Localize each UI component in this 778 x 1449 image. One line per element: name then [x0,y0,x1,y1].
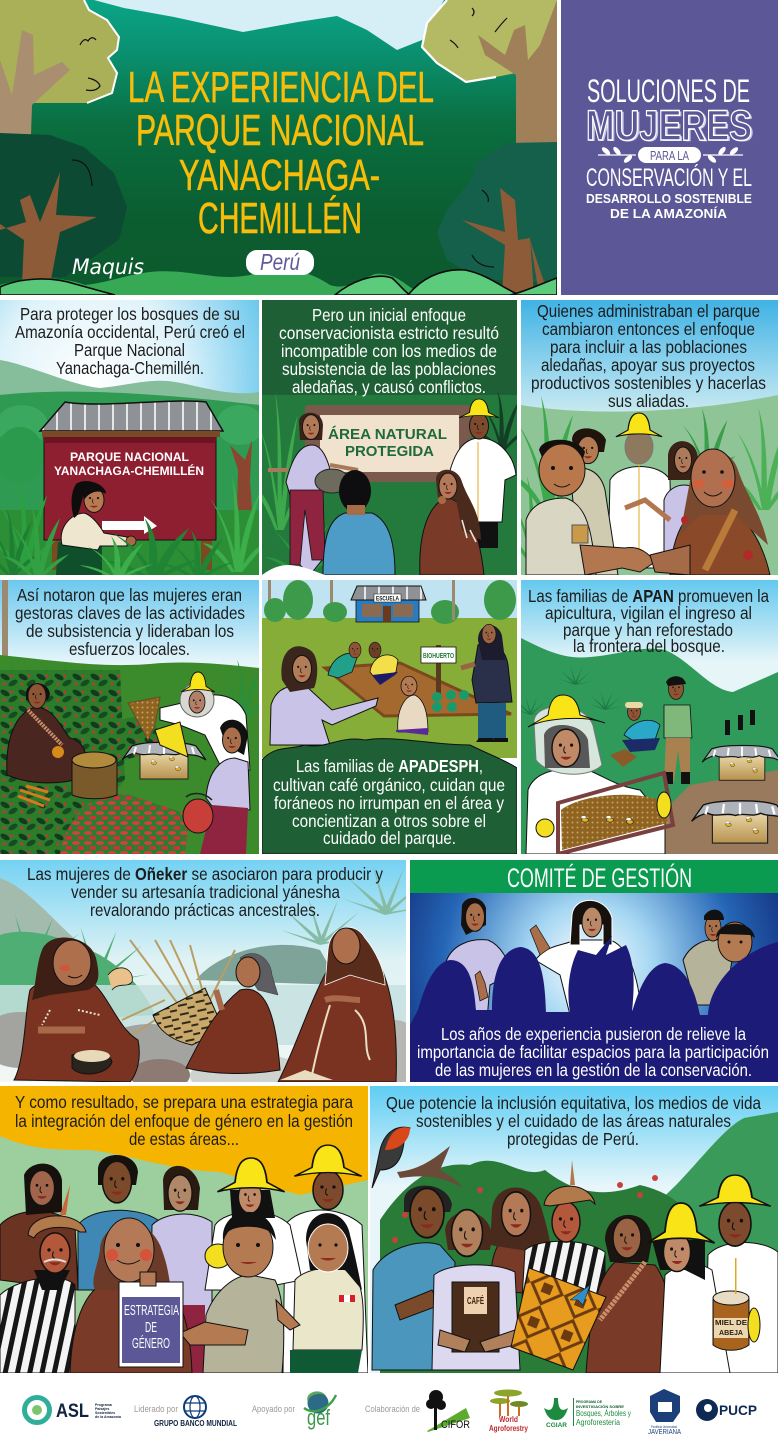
logo: ASL: ASL [56,1401,89,1422]
mountain right [660,1112,778,1373]
strategy document [119,1272,183,1367]
elder back [522,1160,605,1300]
woman cream [276,1213,363,1373]
sky behind mountain [94,0,444,50]
sponsor: gef: gef [307,1405,331,1430]
text: panel 3: para incluir a las poblaciones [550,337,747,357]
panel: park creation sign [0,300,269,578]
sponsor: world bank: GRUPO BANCO MUNDIAL [154,1419,237,1428]
top-left tree [0,0,119,135]
subtitle lines: DE LA AMAZONÍA [610,206,728,221]
posts [52,540,212,570]
basket [153,988,224,1045]
text: panel 2 [279,305,499,397]
area sign: PROTEGIDA [345,443,434,460]
sponsor: gef: Apoyado por [252,1404,295,1414]
panel: Oñeker artisans [0,860,433,1100]
text: panel 3 [531,301,766,411]
ranger left [526,440,596,575]
audience silhouettes [410,936,778,1082]
garden bed [325,663,511,716]
text: panel 9 [15,1092,353,1149]
collaborator: CGIAR FTA: PROGRAMA DE [576,1399,602,1404]
heading band: COMITÉ DE GESTIÓN [507,862,692,893]
beekeeper man [446,399,516,548]
lower-right tree [437,142,557,300]
text: panel 2: incompatible con los medios de [281,341,497,361]
seated woman [420,470,484,575]
sponsor: world bank [134,1396,237,1428]
country label: Perú [260,249,300,275]
beekeeper woman [526,695,665,854]
area sign [305,405,471,482]
woman 1 [14,938,139,1082]
collaborator: CGIAR FTA: CGIAR [546,1422,567,1429]
central woman [530,900,640,1015]
girl with book [432,1210,520,1370]
text: panel 4: Así notaron que las mujeres eran [17,585,242,605]
sign board [40,401,223,540]
text: panel 3: sus aliadas. [608,391,689,411]
lower-left tree [0,133,127,285]
beekeeper woman [647,1203,730,1373]
woman lilac [151,1166,212,1373]
logo: ASL: Paisajes [95,1407,109,1411]
woman back [490,1188,552,1295]
strategy document: DE [145,1319,157,1336]
strategy document: ESTRATEGIA [124,1302,179,1319]
text: panel 9: de estas áreas... [129,1129,239,1149]
subtitle lines [586,163,752,221]
big woman [670,449,770,575]
bushes [0,270,557,295]
woman back left [0,1164,78,1290]
biohuerto sign [421,645,456,695]
honey frame [536,773,673,854]
collaborator: World Agroforestry: World [499,1415,518,1424]
trees at sides [0,405,259,510]
sign board: PARQUE NACIONAL [70,452,189,464]
handshake [580,500,690,575]
text: panel 9: la integración del enfoque de género en la gestión [15,1111,353,1131]
butterfly [570,1285,590,1305]
beekeeper man [699,1175,778,1373]
logo: ASL [24,1398,122,1422]
title: LA EXPERIENCIA DEL [128,63,434,112]
hives [702,745,778,780]
collaborator: CIFOR: Colaboración de [365,1404,420,1414]
text: panel 5: cuidado del parque. [323,828,456,848]
honey jar: ABEJA [719,1328,744,1337]
stump [72,752,117,799]
man blue [78,1155,160,1290]
honey jar [713,1258,760,1350]
logo: ASL: Sostenibles [95,1411,115,1415]
text: panel 5: foráneos no irrumpan en el área y [274,793,504,813]
rocks [0,1012,425,1100]
biohuerto sign: BIOHUERTO [423,653,454,660]
text: panel 4: de subsistencia y lideraban los [26,621,234,641]
beekeeper woman [205,1158,302,1290]
elder [0,1185,86,1373]
woman lilac [664,441,698,552]
squatting man [610,702,660,767]
forest canopy [380,1161,700,1373]
beekeeper with frame [128,672,250,775]
trees [264,580,516,624]
hive [122,742,206,779]
collaborator: PUCP: PUCP [719,1402,757,1418]
dark green text panel [262,739,517,854]
text: panel 5 [273,756,505,848]
text: panel 5: Las familias de APADESPH, [296,756,483,776]
collaborator: CIFOR: CIFOR [441,1419,470,1431]
text: panel 7: revalorando prácticas ancestrales. [90,900,320,920]
text: panel 7: Las mujeres de Oñeker se asociaron para producir y [27,864,383,884]
leaves and pill [598,146,743,164]
text: panel 4: esfuerzos locales. [69,639,190,659]
collaborator: CGIAR FTA [544,1398,631,1429]
honey jar: MIEL DE [715,1318,747,1327]
man blue [372,1186,455,1370]
sticks [122,940,235,1040]
panel: final community [370,1086,778,1373]
panel: protected area conflict [253,300,527,575]
hand gesture [475,971,488,1001]
text: panel 1: Para proteger los bosques de su [20,304,240,324]
ranger man [180,1212,284,1373]
text: panel 1: Yanachaga-Chemillén. [56,358,204,378]
title: YANACHAGA- [179,151,380,200]
standing woman [461,624,512,742]
beekeeper [608,413,672,568]
school: ESCUELA [376,596,400,602]
woman gesturing [270,646,378,745]
text: panel 10: sostenibles y el cuidado de las áreas naturales [416,1111,731,1131]
text: panel 7 [27,864,383,920]
big woman [70,1218,192,1373]
collaborator: CGIAR FTA: Bosques, Árboles y [576,1409,631,1418]
text: panel 4 [15,585,245,659]
child from behind [323,470,395,575]
school [351,586,426,622]
leaves and pill: PARA LA [650,148,689,163]
palms and saplings [514,666,755,735]
panel: title header illustration [0,0,557,300]
area sign: ÁREA NATURAL [328,426,447,443]
woman harvesting [183,720,250,854]
panel: alliance handshake [501,300,778,575]
title [128,63,434,243]
logo: ASL: Programa [95,1403,113,1407]
beekeeper man [283,1145,368,1373]
collaborator: CGIAR FTA: Agroforestería [576,1418,620,1427]
woman planting [56,481,136,575]
collaborator: CIFOR [365,1390,470,1432]
woman 2 [186,953,280,1074]
text: panel 10 [386,1093,761,1149]
text: panel 6: apicultura, vigilan el ingreso al [545,603,752,623]
collaborator: Javeriana: JAVERIANA [648,1429,681,1436]
text: panel 2: Pero un inicial enfoque [312,305,466,325]
footer: partner logos [24,1389,757,1436]
standing man [664,676,692,784]
top-right tree [422,0,557,143]
heading band [410,860,778,893]
collaborator: World Agroforestry [489,1390,528,1433]
woven textile [511,1268,606,1370]
sign board: YANACHAGA-CHEMILLÉN [54,465,204,478]
text: panel 7: vender su artesanía tradicional yánesha [71,882,340,902]
strategy document: GÉNERO [132,1335,170,1352]
panel: Comité de Gestión [410,893,778,1082]
rangers [683,910,755,1005]
title: CHEMILLÉN [198,194,362,243]
panel: biohuerto and school [262,580,517,854]
collaborator: Javeriana: Pontificia Universidad [651,1424,677,1429]
children planting [328,642,469,735]
collaborator: CGIAR FTA: INVESTIGACIÓN SOBRE [576,1404,624,1409]
text: panel 9: Y como resultado, se prepara una estrategia para [15,1092,353,1112]
text: panel 6: Las familias de APAN promueven la [528,586,769,606]
text: panel 1: Parque Nacional [74,340,185,360]
text: panel 1: Amazonía occidental, Perú creó el [15,322,245,342]
sponsor: world bank: Liderado por [134,1404,178,1414]
text: panel 10: protegidas de Perú. [507,1129,639,1149]
grass foreground [0,476,269,578]
text: panel 6: parque y han reforestado [563,620,733,640]
signature: Maquis [72,255,144,279]
text: panel 2: subsistencia de las poblaciones [282,359,496,379]
arrow [102,516,157,534]
text: panel 5: concientizan a otros sobre el [292,811,486,831]
ranger 2 [570,428,618,575]
collaborator: Javeriana [648,1389,681,1436]
panel: series logo [561,0,778,295]
subtitle lines: DESARROLLO SOSTENIBLE [586,191,752,206]
panel: APAN beekeeping [514,580,778,854]
branch and bird [372,1127,463,1188]
text: panel 6: la frontera del bosque. [573,636,725,656]
collaborator: PUCP [696,1399,757,1421]
left woman [444,898,510,1020]
woman with sash [586,1215,675,1373]
logo: ASL: de la Amazonía [95,1415,122,1419]
text: panel 2: conservacionista estricto resultó [279,323,499,343]
woman 3 [278,927,396,1082]
panel: women managing subsistence [0,580,267,854]
collaborator: World Agroforestry: Agroforestry [489,1424,528,1433]
girl with book: CAFÉ [467,1294,484,1307]
text: panel 2: aledañas, y causó conflictos. [292,377,486,397]
text: panel 4: gestoras claves de las actividades [15,603,245,623]
title: PARQUE NACIONAL [136,106,424,155]
panel: gender strategy group [0,1086,368,1373]
text: panel 5: cultivan café orgánico, cuidan que [273,775,505,795]
text: panel 8 [417,1024,769,1080]
woman with basket [268,413,358,575]
text: panel 1 [15,304,245,378]
text: panel 6 [528,586,769,656]
seated woman [7,683,86,806]
sponsor: gef [252,1391,336,1430]
